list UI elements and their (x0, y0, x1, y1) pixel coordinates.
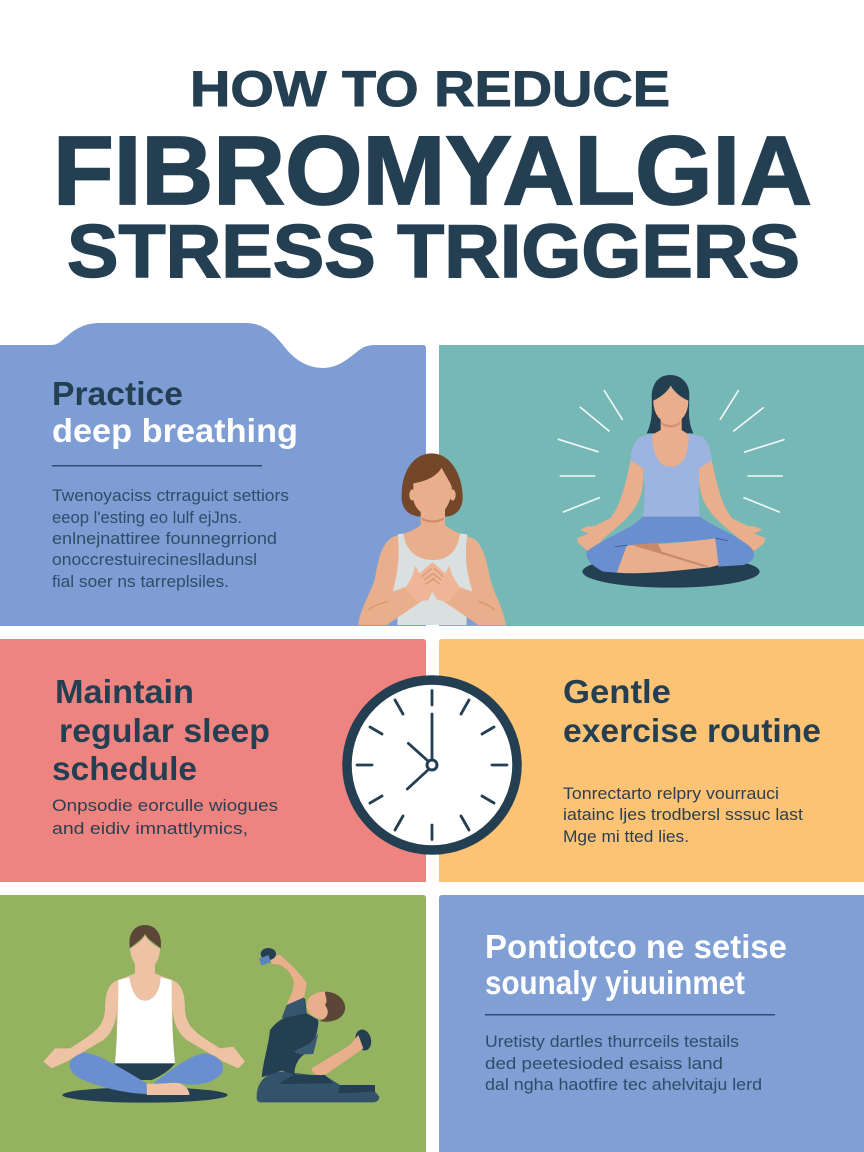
body text (485, 1033, 762, 1094)
heading: exercise routine (563, 712, 821, 749)
icon: woman hands on chest (358, 453, 506, 625)
body text: Onpsodie eorculle wiogues (52, 797, 278, 815)
panel: green stretching (0, 895, 426, 1152)
title (53, 61, 812, 293)
body text: dal ngha haotfire tec ahelvitaju lerd (485, 1076, 762, 1094)
body text: Uretisty dartles thurrceils testails (485, 1033, 739, 1051)
heading: Gentle (563, 673, 671, 710)
body text: Mge mi tted lies. (563, 828, 689, 846)
icon: person stretching with weights (257, 948, 379, 1102)
body text: onoccrestuirecineslladunsl (52, 551, 257, 569)
heading: deep breathing: deep breathing (52, 412, 298, 449)
icon: clock (347, 680, 517, 850)
heading (52, 673, 270, 787)
body text: enlnejnattiree founnegrriond (52, 530, 277, 548)
panel: gentle exercise routine (439, 639, 864, 882)
icon: meditating woman (577, 375, 766, 588)
panel: teal meditation (439, 345, 864, 626)
heading (485, 928, 787, 1001)
title: STRESS TRIGGERS (67, 209, 800, 293)
body text: eeop l'esting eo lulf ejJns. (52, 509, 242, 527)
body text: fial soer ns tarreplsiles. (52, 573, 229, 591)
panel: noise and sound environment (439, 895, 864, 1152)
icon: calm rays (558, 391, 784, 512)
panel: practice deep breathing (0, 323, 426, 626)
title: HOW TO REDUCE (190, 61, 670, 117)
body text (52, 487, 289, 591)
body text (52, 797, 278, 838)
heading (563, 673, 821, 749)
body text (563, 785, 803, 846)
heading: Maintain (55, 673, 194, 710)
body text: ded peetesioded esaiss land (485, 1055, 723, 1073)
heading: practice: Practice (52, 375, 183, 412)
heading: regular sleep (59, 712, 270, 749)
body text: iatainc ljes trodbersl sssuc last (563, 806, 803, 824)
body text: Twenoyaciss ctrraguict settiors (52, 487, 289, 505)
body text: and eidiv imnattlymics, (52, 820, 248, 838)
heading: Pontiotco ne setise (485, 928, 787, 965)
icon: seated meditating person (43, 925, 245, 1103)
heading: schedule (52, 750, 197, 787)
heading: sounaly yiuuinmet (485, 964, 745, 1001)
body text: Tonrectarto relpry vourrauci (563, 785, 779, 803)
title: FIBROMYALGIA (53, 116, 812, 225)
panel: regular sleep schedule (0, 639, 426, 882)
